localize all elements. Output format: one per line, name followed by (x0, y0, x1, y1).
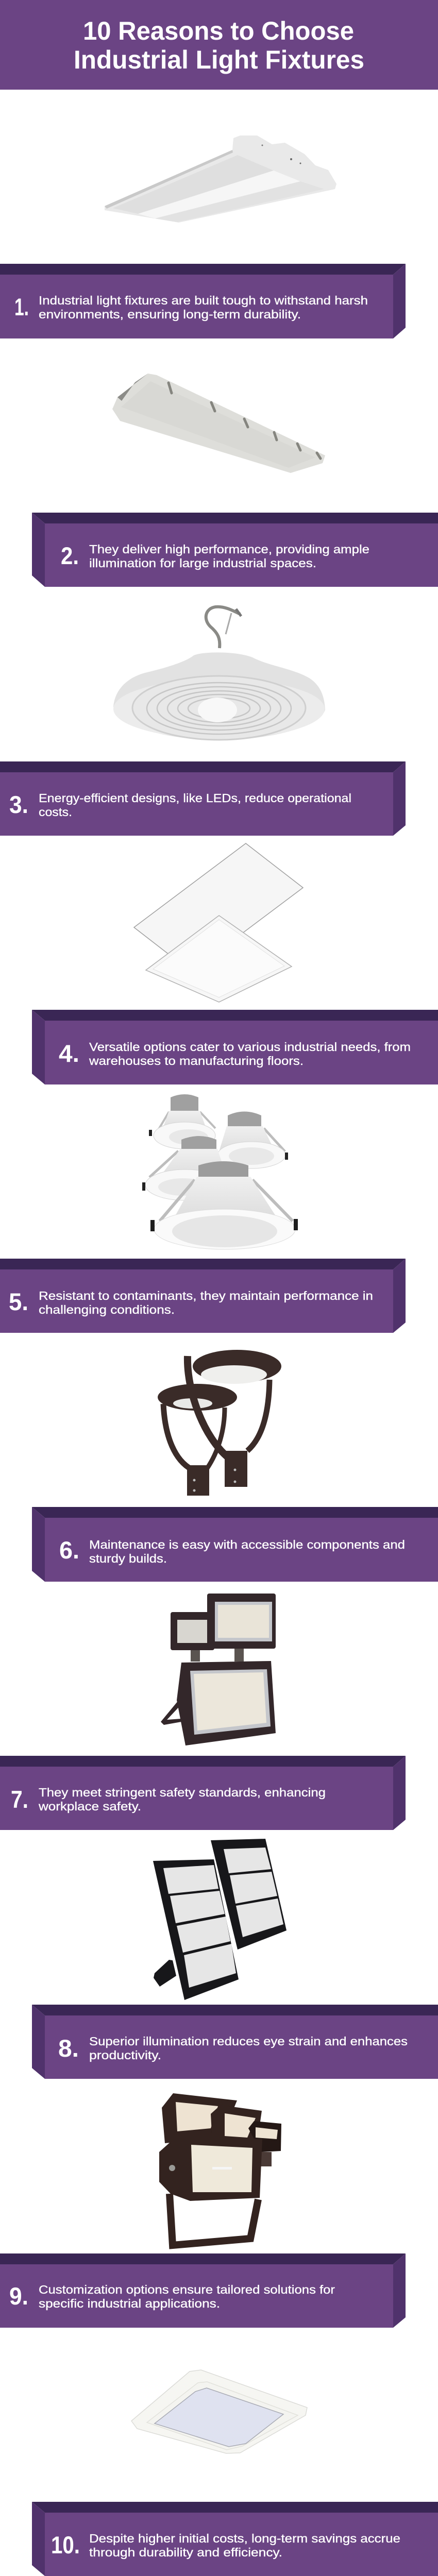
icon: LED flood lights (161, 1594, 276, 1745)
front flood light (159, 2134, 262, 2245)
icon: linear high bay fixture (105, 135, 336, 223)
text 1 (39, 294, 368, 321)
text 2 (89, 543, 369, 570)
text 6 (89, 1538, 405, 1565)
panel: reason 3 (0, 761, 406, 836)
panel: reason 8 (32, 2005, 438, 2079)
number 3: 3. (9, 791, 28, 818)
number 5: 5. (9, 1288, 28, 1315)
number 4: 4. (59, 1040, 79, 1067)
icon: canopy light (131, 2370, 307, 2453)
text 3: Energy-efficient designs, like LEDs, reduce operational (39, 791, 351, 805)
text 1: environments, ensuring long-term durability. (39, 308, 301, 321)
back stadium light (211, 1839, 287, 1950)
text 10: Despite higher initial costs, long-term savings accrue (89, 2532, 400, 2545)
downlight: top left (149, 1094, 215, 1149)
number 10: 10. (51, 2531, 80, 2558)
text 9: Customization options ensure tailored solutions for (39, 2283, 335, 2296)
number 6: 6. (59, 1536, 79, 1564)
text 10 (89, 2532, 400, 2559)
text 4 (89, 1040, 411, 1067)
text 3: costs. (39, 805, 72, 819)
text 4: Versatile options cater to various industrial needs, from (89, 1040, 411, 1054)
icon: flat LED panels (134, 843, 303, 1002)
text 8 (89, 2035, 408, 2062)
text 10: through durability and efficiency. (89, 2546, 282, 2559)
text 3 (39, 791, 351, 819)
panel: reason 5 (0, 1259, 406, 1333)
text 4: warehouses to manufacturing floors. (89, 1054, 304, 1067)
text 5 (39, 1289, 373, 1316)
panel: reason 7 (0, 1756, 406, 1830)
icon: post top area lights (158, 1350, 281, 1496)
panel: reason 9 (0, 2253, 406, 2328)
icon: vapor tight linear fixture (112, 374, 325, 473)
panel: reason 1 (0, 264, 406, 338)
icon: recessed downlights (142, 1094, 298, 1249)
text 6: Maintenance is easy with accessible components and (89, 1538, 405, 1551)
downlight: front (150, 1161, 298, 1249)
number 9: 9. (9, 2282, 28, 2310)
icon: round high bay with hook (113, 607, 325, 740)
number 7: 7. (11, 1786, 28, 1813)
large post light (188, 1350, 281, 1487)
text 5: Resistant to contaminants, they maintain performance in (39, 1289, 373, 1302)
number 1: 1. (14, 293, 29, 320)
small post light (158, 1384, 237, 1496)
panel: header (0, 0, 438, 90)
text 7: workplace safety. (38, 1800, 141, 1813)
text 5: challenging conditions. (39, 1303, 175, 1316)
panel: reason 10 (32, 2502, 438, 2576)
text 7: They meet stringent safety standards, enhancing (39, 1786, 326, 1799)
text 8: Superior illumination reduces eye strain and enhances (89, 2035, 408, 2048)
text 7 (38, 1786, 326, 1813)
icon: stadium flood lights (153, 1839, 287, 2000)
text 2: They deliver high performance, providing ample (89, 543, 369, 556)
number 8: 8. (58, 2035, 79, 2062)
downlight: middle left (142, 1136, 227, 1200)
title: Industrial Light Fixtures (74, 45, 364, 74)
panel: reason 2 (32, 513, 438, 587)
front stadium light (153, 1859, 239, 2000)
rear flood lights (162, 2093, 281, 2166)
downlight: top right (217, 1112, 288, 1168)
text 1: Industrial light fixtures are built tough to withstand harsh (39, 294, 368, 307)
panel: reason 6 (32, 1507, 438, 1582)
title (74, 16, 364, 74)
text 9 (39, 2283, 335, 2310)
panel: reason 4 (32, 1010, 438, 1084)
icon: bronze flood lights with yoke (159, 2093, 281, 2245)
number 2: 2. (61, 542, 79, 569)
text 9: specific industrial applications. (39, 2297, 220, 2310)
title: 10 Reasons to Choose (83, 16, 354, 45)
text 6: sturdy builds. (89, 1552, 167, 1565)
text 8: productivity. (89, 2048, 161, 2062)
text 2: illumination for large industrial spaces. (89, 556, 316, 570)
